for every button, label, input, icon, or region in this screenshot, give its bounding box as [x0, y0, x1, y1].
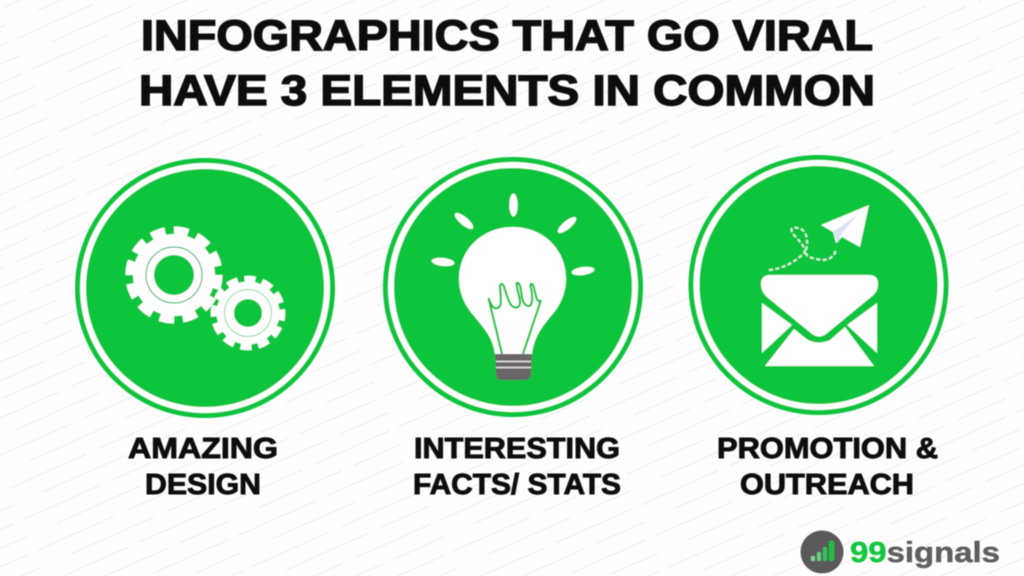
logo wordmark: 99signals — [850, 537, 1000, 569]
icon: signal bars — [800, 530, 844, 574]
title: HAVE 3 ELEMENTS IN COMMON — [139, 67, 875, 115]
panel: promotion and outreach — [688, 155, 948, 415]
label: interesting facts: INTERESTING — [414, 433, 620, 465]
panel: amazing design — [75, 158, 335, 418]
icon: large gear — [130, 231, 218, 319]
label: promotion and outreach — [717, 433, 938, 501]
label: interesting facts: FACTS/ STATS — [413, 469, 621, 501]
icon: envelope — [761, 275, 878, 366]
badge circle: design — [75, 158, 335, 418]
title — [139, 12, 875, 115]
icon: light bulb — [459, 227, 566, 380]
icon: light rays — [431, 194, 595, 277]
logo: 99signals — [800, 530, 1000, 574]
panel: interesting facts — [383, 157, 643, 417]
badge circle: facts — [383, 157, 643, 417]
label: amazing design — [128, 433, 278, 501]
label: amazing design: AMAZING — [128, 433, 278, 465]
icon: small gear — [214, 280, 282, 346]
label: promotion and outreach: OUTREACH — [740, 469, 914, 501]
icon: paper plane — [821, 205, 869, 247]
title: INFOGRAPHICS THAT GO VIRAL — [141, 12, 873, 60]
icon: dashed flight path — [769, 228, 836, 270]
badge circle: promotion — [688, 155, 948, 415]
label: interesting facts — [413, 433, 621, 501]
label: promotion and outreach: PROMOTION & — [717, 433, 938, 465]
label: amazing design: DESIGN — [145, 469, 261, 501]
